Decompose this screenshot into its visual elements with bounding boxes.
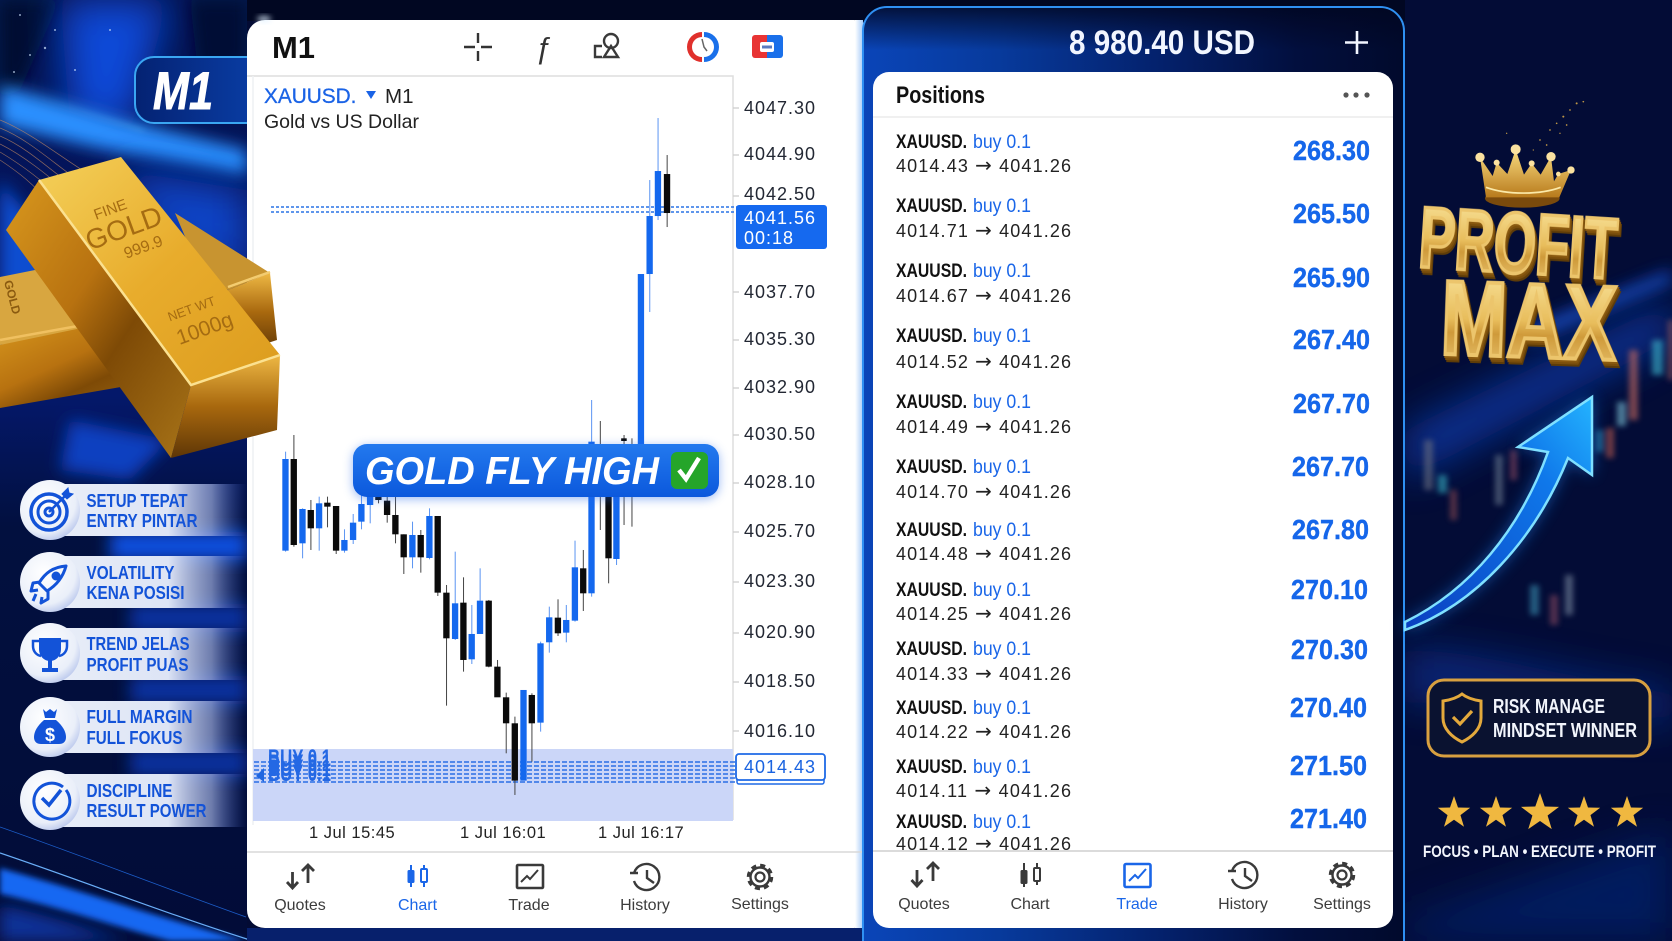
position row 2	[896, 198, 1370, 237]
nav: trade	[1124, 864, 1150, 887]
feature: setup	[20, 480, 247, 540]
position row 11: XAUUSD.	[896, 757, 967, 778]
back bar right	[175, 213, 277, 352]
feature: margin: FULL FOKUS	[86, 727, 182, 748]
position row 3: 4014.67 → 4041.26	[896, 283, 1071, 307]
feature: volatility	[20, 552, 247, 612]
position row 4: XAUUSD.	[896, 326, 967, 347]
position row 7: 267.80	[1292, 514, 1369, 545]
arrow: rising blue	[1405, 397, 1592, 630]
add button	[1345, 31, 1368, 54]
position row 7	[896, 520, 1368, 560]
position row 4: 267.40	[1293, 324, 1370, 355]
position row 11: 271.50	[1290, 750, 1367, 781]
position row 8: 270.10	[1291, 574, 1368, 605]
position row 12: 4014.12 → 4041.26	[896, 831, 1071, 855]
position row 9	[896, 640, 1368, 680]
price axis: 4020.90	[744, 622, 816, 642]
position row 8: buy 0.1	[973, 580, 1031, 601]
instrument label: Gold vs US Dollar	[264, 111, 419, 133]
price axis	[733, 98, 816, 741]
buy order lines: BUY 0.1	[268, 750, 331, 777]
position row 9: buy 0.1	[973, 639, 1031, 660]
position row 6	[896, 456, 1368, 498]
star rating	[1438, 793, 1643, 829]
position row 10	[896, 698, 1366, 738]
price axis: 4032.90	[744, 377, 816, 397]
position row 11: buy 0.1	[973, 757, 1031, 778]
left bottom navigation	[247, 852, 862, 914]
right bottom navigation: Chart	[1010, 896, 1050, 913]
left chart panel	[247, 16, 872, 928]
position row 3: buy 0.1	[973, 261, 1031, 282]
position row 12: buy 0.1	[973, 812, 1031, 833]
position row 6: 267.70	[1292, 451, 1369, 482]
positions card: Positions	[896, 82, 985, 109]
instrument label: XAUUSD.	[264, 85, 356, 108]
feature: margin	[20, 697, 247, 757]
price axis: 4042.50	[744, 184, 816, 204]
risk badge: RISK MANAGE	[1493, 696, 1605, 718]
front bar: NET WT	[166, 293, 217, 324]
left bottom navigation: History	[620, 897, 670, 914]
position row 1	[896, 134, 1370, 172]
nav: history	[1228, 862, 1257, 888]
position row 10: buy 0.1	[973, 698, 1031, 719]
buy order lines: BUY 0.1	[268, 760, 331, 787]
panel top shade	[864, 8, 1403, 50]
nav: trade	[517, 865, 543, 888]
candlestick chart	[282, 118, 670, 795]
front bar: GOLD	[81, 200, 166, 256]
time axis: 1 Jul 15:45	[309, 824, 395, 842]
right bottom navigation	[873, 851, 1393, 913]
balance: 8 980.40 USD	[1069, 24, 1255, 62]
feature: volatility: VOLATILITY	[86, 562, 175, 583]
position row 1: 4014.43 → 4041.26	[896, 153, 1071, 177]
banner: gold fly high: GOLD FLY HIGH	[365, 450, 660, 493]
front bar: 1000g	[173, 308, 236, 350]
buy order lines: BUY 0.1	[268, 745, 331, 772]
current price tag: 4041.56	[744, 208, 816, 228]
buy zone	[253, 749, 733, 821]
position row 7: 4014.48 → 4041.26	[896, 541, 1071, 565]
chart toolbar: M1	[272, 30, 315, 65]
position row 2: 265.50	[1293, 198, 1370, 229]
current price lines	[271, 207, 737, 212]
gold bars	[0, 157, 280, 458]
front bar: FINE	[91, 196, 129, 224]
time axis	[309, 824, 684, 842]
chart toolbar: ƒ	[535, 32, 551, 65]
nav: chart	[1020, 863, 1040, 887]
nav: quotes	[287, 865, 314, 888]
position row 11: 4014.11 → 4041.26	[896, 778, 1071, 802]
banner: gold fly high	[353, 444, 719, 497]
left bottom navigation: Trade	[508, 897, 550, 914]
icon: target	[31, 488, 73, 530]
icon: crown	[1475, 101, 1584, 208]
top corner sparkle	[257, 16, 271, 22]
back bar left: GOLD	[1, 279, 24, 316]
feature: trend: PROFIT PUAS	[86, 654, 188, 675]
time axis: 1 Jul 16:17	[598, 824, 684, 842]
title: profit max	[1416, 190, 1620, 383]
position row 2: 4014.71 → 4041.26	[896, 218, 1071, 242]
icon: check circle	[34, 783, 70, 819]
feature: discipline: RESULT POWER	[86, 800, 206, 821]
left bottom navigation: Chart	[398, 897, 438, 914]
position row 4: 4014.52 → 4041.26	[896, 349, 1071, 373]
icon: money bag	[34, 709, 66, 745]
position row 12: 271.40	[1290, 803, 1367, 834]
price axis: 4023.30	[744, 571, 816, 591]
position row 7: buy 0.1	[973, 520, 1031, 541]
right bottom navigation: History	[1218, 896, 1268, 913]
position row 5: XAUUSD.	[896, 392, 967, 413]
position row 1: 268.30	[1293, 135, 1370, 166]
risk badge: MINDSET WINNER	[1493, 720, 1637, 742]
position row 4: buy 0.1	[973, 326, 1031, 347]
price axis: 4025.70	[744, 521, 816, 541]
price axis: 4037.70	[744, 282, 816, 302]
feature: discipline: DISCIPLINE	[86, 780, 172, 801]
position row 8	[896, 580, 1368, 620]
position row 5: 4014.49 → 4041.26	[896, 414, 1071, 438]
back bar left	[0, 265, 190, 408]
feature: margin: FULL MARGIN	[86, 706, 192, 727]
position row 8: XAUUSD.	[896, 580, 967, 601]
right trade panel	[863, 7, 1404, 941]
position row 1: XAUUSD.	[896, 132, 967, 153]
price axis: 4030.50	[744, 424, 816, 444]
position row 3: 265.90	[1293, 262, 1370, 293]
right bottom navigation: Quotes	[898, 896, 950, 913]
position row 9: 4014.33 → 4041.26	[896, 661, 1071, 685]
entry price tag: 4014.43	[744, 757, 816, 777]
price axis: 4035.30	[744, 329, 816, 349]
nav: quotes	[912, 863, 939, 886]
M1 badge	[135, 57, 265, 123]
position row 5: buy 0.1	[973, 392, 1031, 413]
front bar: 999.9	[122, 233, 165, 263]
title: profit max: MAX	[1439, 259, 1619, 383]
position row 2: XAUUSD.	[896, 196, 967, 217]
position row 3	[896, 263, 1370, 302]
position row 1: buy 0.1	[973, 132, 1031, 153]
feature: setup: SETUP TEPAT	[86, 490, 188, 511]
feature list	[20, 480, 247, 830]
nav: settings	[1330, 864, 1354, 886]
entry price tag	[736, 754, 825, 784]
position row 7: XAUUSD.	[896, 520, 967, 541]
position row 2: buy 0.1	[973, 196, 1031, 217]
feature: volatility: KENA POSISI	[86, 582, 184, 603]
nav: history	[630, 864, 659, 890]
feature: discipline	[20, 770, 247, 830]
feature: setup: ENTRY PINTAR	[86, 510, 198, 531]
price axis: 4044.90	[744, 144, 816, 164]
icon: green check	[671, 452, 708, 489]
positions card	[873, 72, 1393, 928]
price axis: 4016.10	[744, 721, 816, 741]
current price tag: 00:18	[744, 228, 794, 248]
feature: trend: TREND JELAS	[86, 633, 190, 654]
instrument label: M1	[385, 85, 413, 108]
price axis: 4018.50	[744, 671, 816, 691]
position row 6: 4014.70 → 4041.26	[896, 479, 1071, 503]
positions list	[896, 132, 1370, 855]
position row 9: XAUUSD.	[896, 639, 967, 660]
position row 8: 4014.25 → 4041.26	[896, 601, 1071, 625]
icon: trophy	[33, 638, 67, 672]
position row 12	[896, 808, 1366, 850]
position row 5	[896, 394, 1370, 433]
instrument label	[264, 85, 419, 133]
icon: shield	[1443, 694, 1481, 742]
current price tag	[736, 205, 827, 249]
left bottom navigation: Settings	[731, 896, 789, 913]
position row 3: XAUUSD.	[896, 261, 967, 282]
time axis: 1 Jul 16:01	[460, 824, 546, 842]
position row 12: XAUUSD.	[896, 812, 967, 833]
position row 6: buy 0.1	[973, 457, 1031, 478]
position row 10: 270.40	[1290, 692, 1367, 723]
position row 9: 270.30	[1291, 634, 1368, 665]
position row 4	[896, 328, 1370, 368]
risk badge	[1428, 680, 1650, 756]
position row 10: XAUUSD.	[896, 698, 967, 719]
price axis: 4047.30	[744, 98, 816, 118]
icon: money bag: $	[45, 725, 55, 745]
chart frame	[247, 76, 733, 825]
buy order lines	[254, 745, 735, 787]
M1 badge: M1	[153, 62, 213, 121]
position row 10: 4014.22 → 4041.26	[896, 719, 1071, 743]
feature: trend	[20, 623, 247, 683]
front bar	[6, 157, 280, 458]
buy order lines: BUY 0.1	[268, 755, 331, 782]
position row 6: XAUUSD.	[896, 457, 967, 478]
position row 5: 267.70	[1293, 388, 1370, 419]
nav: chart	[408, 865, 427, 887]
chart toolbar	[272, 30, 783, 65]
right bottom navigation: Trade	[1116, 896, 1158, 913]
right bottom navigation: Settings	[1313, 896, 1371, 913]
position row 11	[896, 756, 1366, 797]
icon: rocket	[31, 566, 66, 603]
price axis: 4028.10	[744, 472, 816, 492]
nav: settings	[748, 866, 772, 888]
left bottom navigation: Quotes	[274, 897, 326, 914]
